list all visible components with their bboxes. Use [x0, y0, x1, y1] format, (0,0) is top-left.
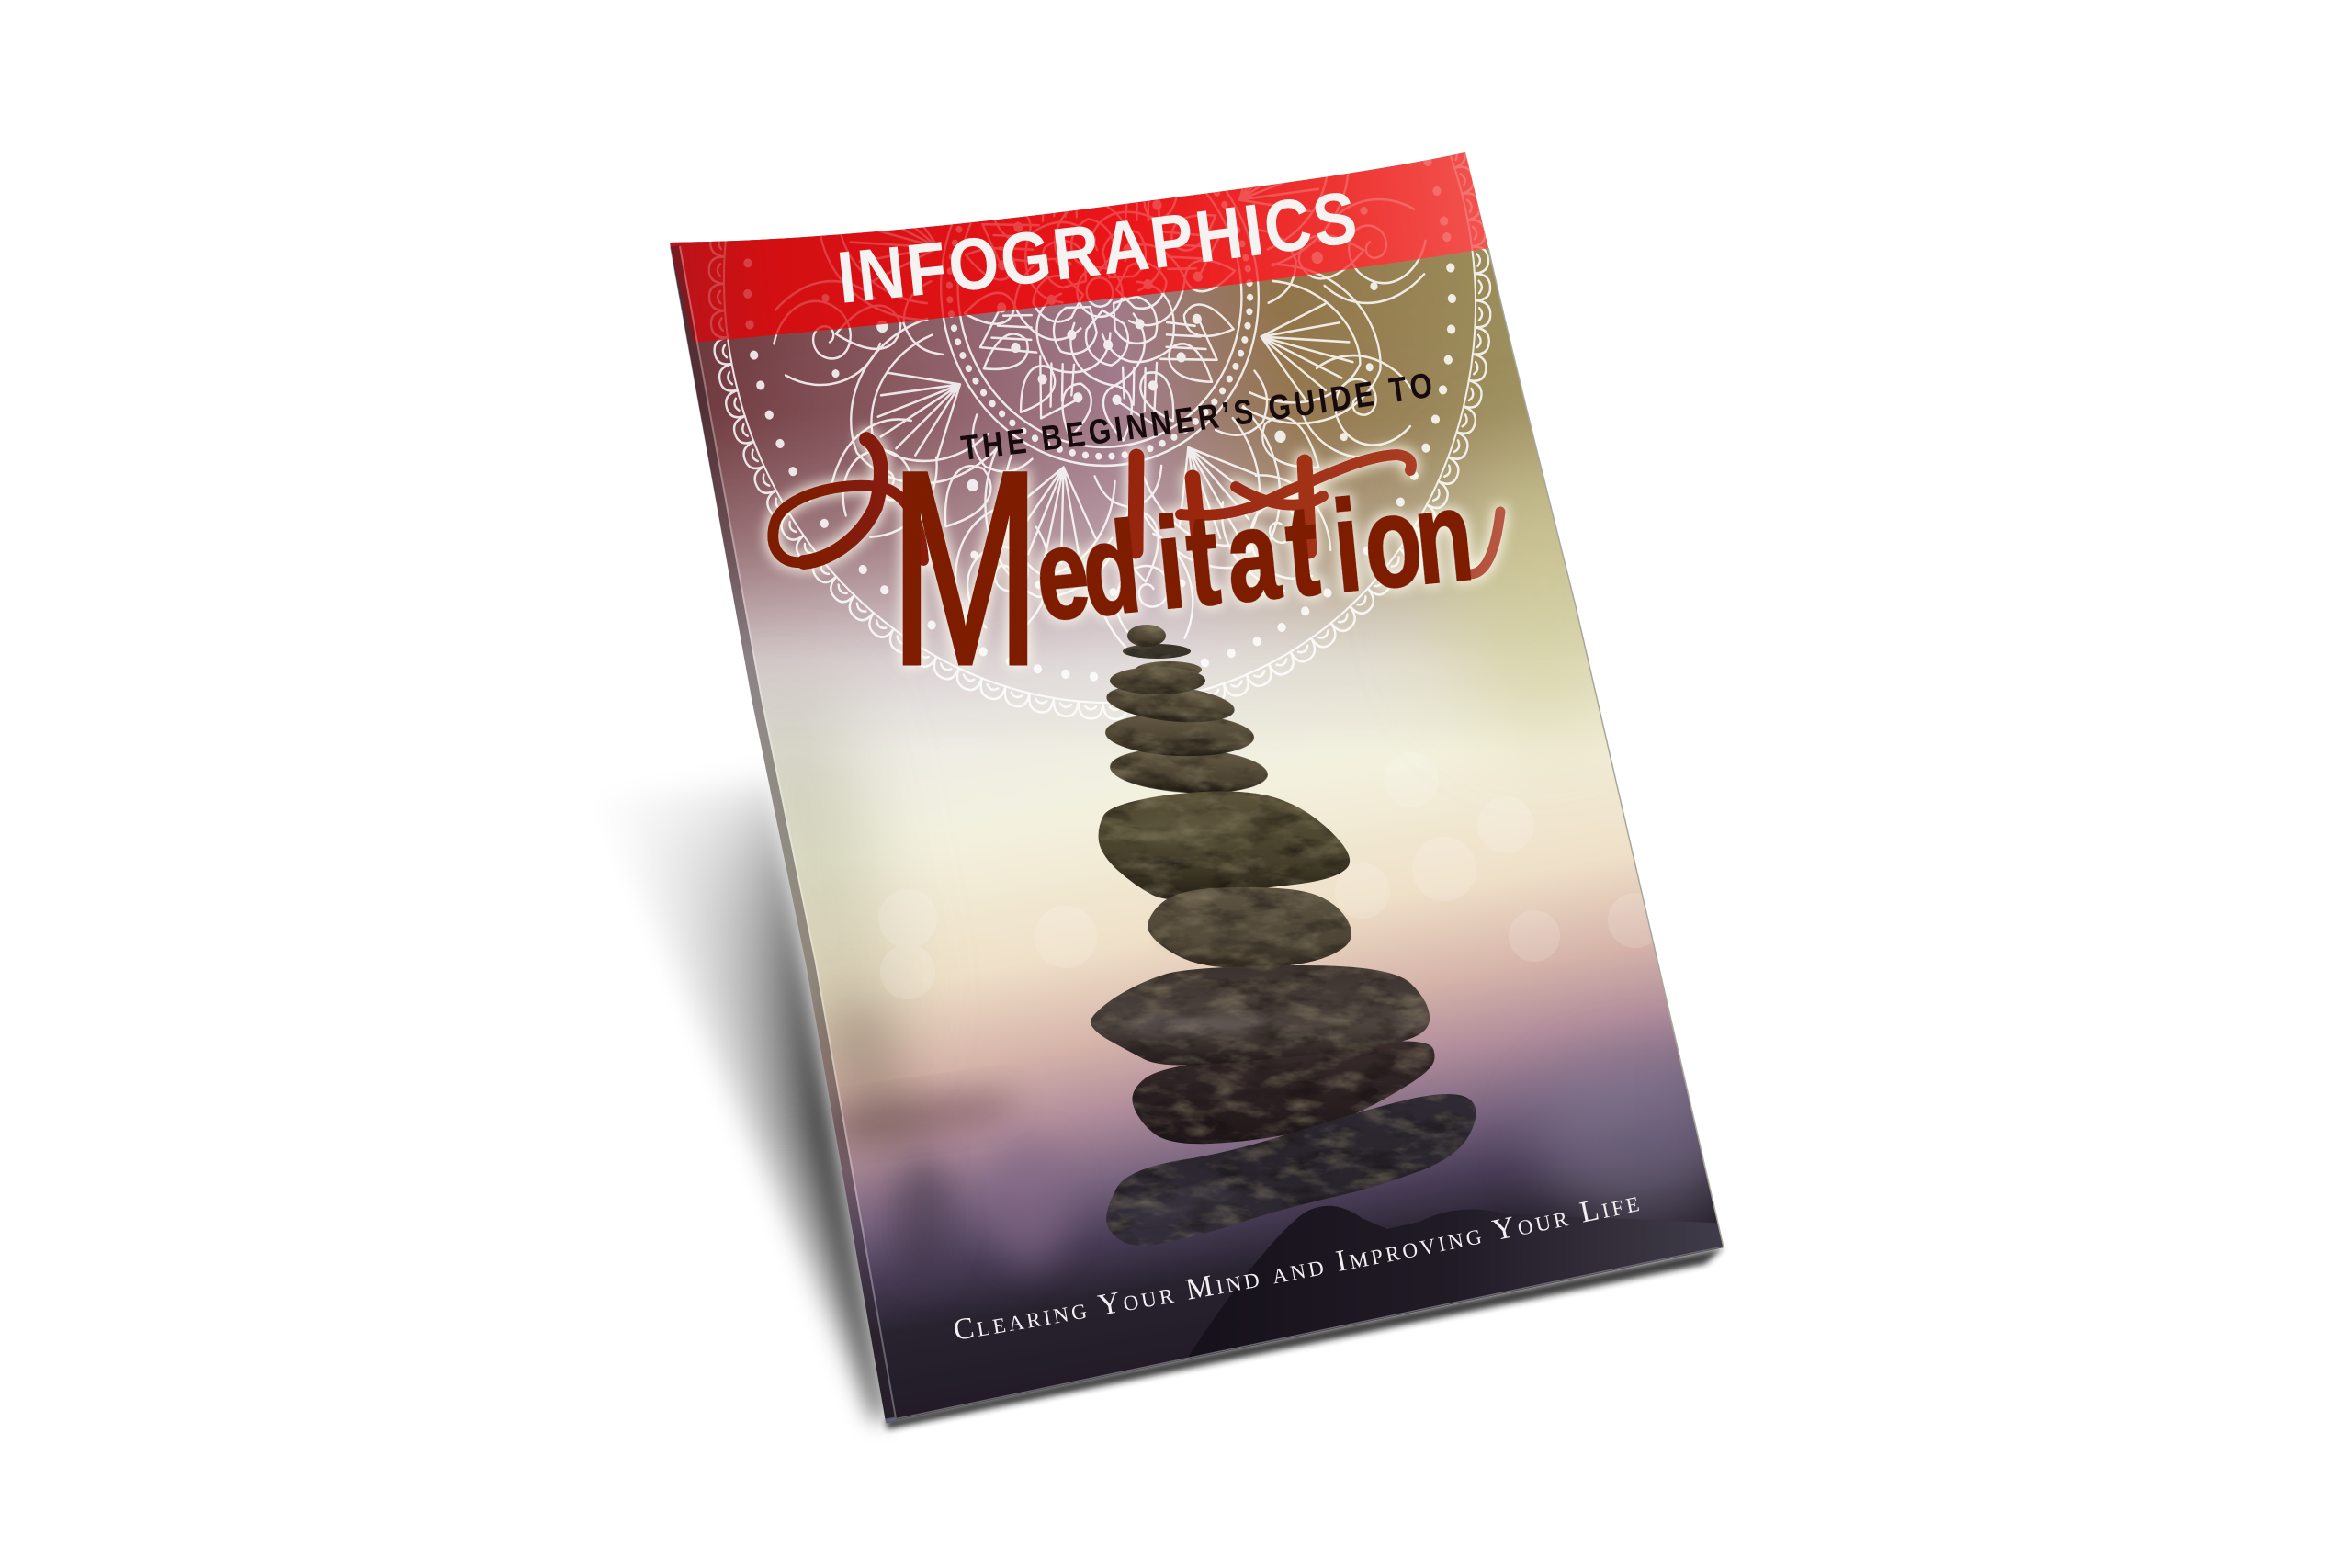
base rock: [1184, 1206, 1727, 1369]
cover background artwork: [643, 138, 1746, 1442]
flat grey stone: [1091, 965, 1430, 1066]
balanced stone stack: [1091, 625, 1476, 1246]
banner title: INFOGRAPHICS: [840, 193, 1355, 303]
red banner: [670, 152, 1488, 343]
stone highlights: [1125, 818, 1286, 1225]
small top stones: [1104, 625, 1269, 796]
rounded middle stone: [1148, 887, 1351, 968]
mandala: [713, 248, 1492, 720]
cast shadow: [602, 762, 1724, 1429]
title: Meditation: editation: [1030, 463, 1478, 648]
title: Meditation: M: [889, 414, 1041, 722]
flat dark stone: [1132, 1042, 1435, 1144]
tagline: Clearing Your Mind and Improving Your Life: [955, 1197, 1639, 1339]
subtitle: the beginner's guide to: THE BEGINNER’S GUIDE TO: [960, 373, 1431, 459]
large olive stone: [1099, 791, 1350, 900]
book cover: [670, 152, 1724, 1424]
title: Meditation: [773, 414, 1500, 722]
infographic book mockup: [639, 152, 1725, 1435]
spine edge: [674, 246, 1724, 1421]
long bottom stone: [1106, 1094, 1476, 1246]
bokeh lights: [880, 893, 1652, 999]
